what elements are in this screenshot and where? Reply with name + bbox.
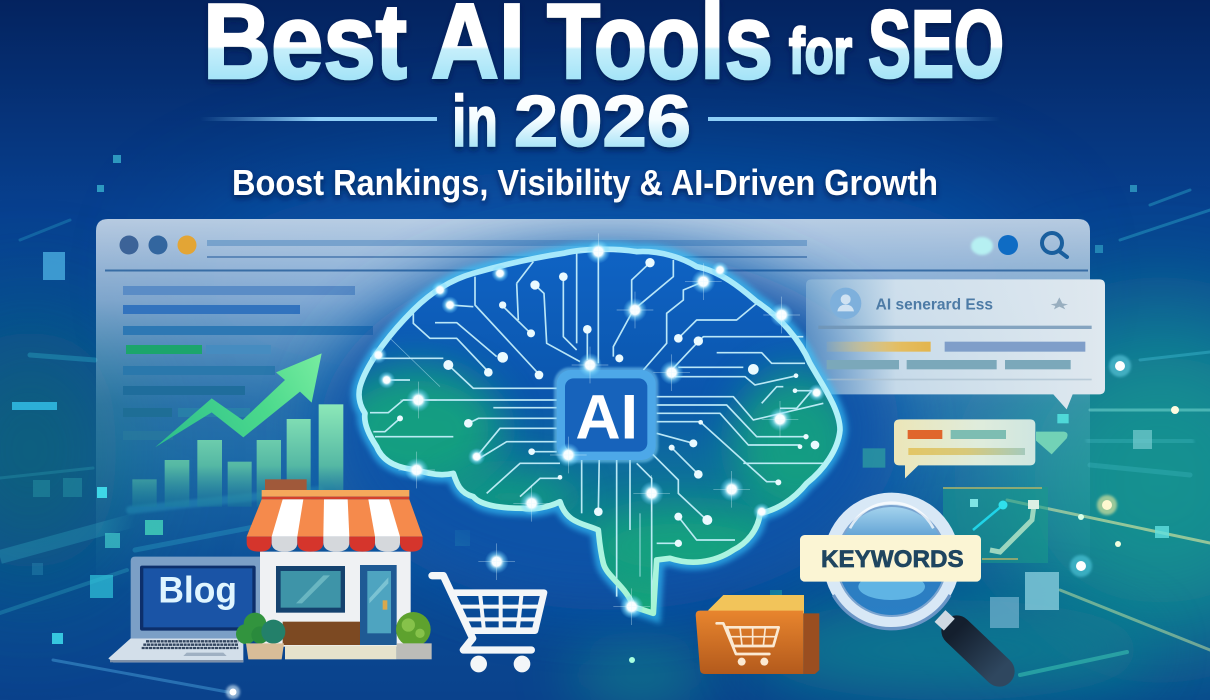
icon: search — [1042, 233, 1067, 257]
blog label: Blog — [158, 569, 237, 610]
circuit traces — [370, 250, 823, 613]
store door — [360, 565, 397, 645]
card lines — [818, 326, 1092, 380]
AI chip — [554, 367, 658, 463]
keywords label: KEYWORDS — [821, 546, 964, 573]
heading: in 2026 — [452, 82, 691, 162]
icon: laptop with Blog screen — [108, 557, 260, 662]
browser window controls — [120, 236, 196, 254]
heading: in 2026: 2026 — [514, 82, 691, 162]
icon: star — [1051, 297, 1068, 309]
panel: browser window — [96, 219, 1090, 590]
glowing circuit nodes — [370, 233, 825, 625]
store awning — [247, 490, 423, 552]
address bar — [207, 240, 807, 258]
heading rules — [200, 117, 1000, 121]
box cart mark — [717, 623, 779, 666]
panel: small speech bubble — [863, 414, 1069, 478]
icon: potted plants — [236, 612, 432, 659]
browser right controls — [971, 235, 1018, 255]
ambient sparkles — [226, 355, 1179, 699]
subtitle: Boost Rankings, Visibility & AI-Driven Growth — [232, 162, 938, 203]
blue glow behind brain — [320, 250, 900, 610]
brain outline — [359, 249, 840, 613]
bar chart — [132, 404, 343, 507]
icon: magnifying glass — [800, 493, 999, 671]
title: for — [789, 15, 852, 87]
mini trend panel — [943, 487, 1048, 563]
page content lines — [123, 286, 373, 440]
icon: green growth arrow — [155, 353, 322, 447]
card heading: AI senerard Ess — [876, 296, 993, 313]
brain fill — [362, 252, 838, 610]
keywords label — [800, 535, 981, 582]
icon: orange box with cart — [696, 595, 819, 674]
panel: AI generated card — [806, 279, 1105, 409]
icon: shopping cart — [432, 576, 544, 672]
circuit end points — [397, 258, 819, 547]
store window — [276, 566, 345, 613]
icon: avatar — [830, 288, 861, 319]
floating data squares — [12, 155, 1169, 644]
brain — [330, 233, 860, 625]
brain glow — [359, 249, 840, 613]
icon: storefront — [247, 479, 423, 659]
AI chip: AI — [575, 382, 638, 452]
heading: in 2026: in — [452, 82, 498, 162]
title — [203, 0, 1004, 101]
